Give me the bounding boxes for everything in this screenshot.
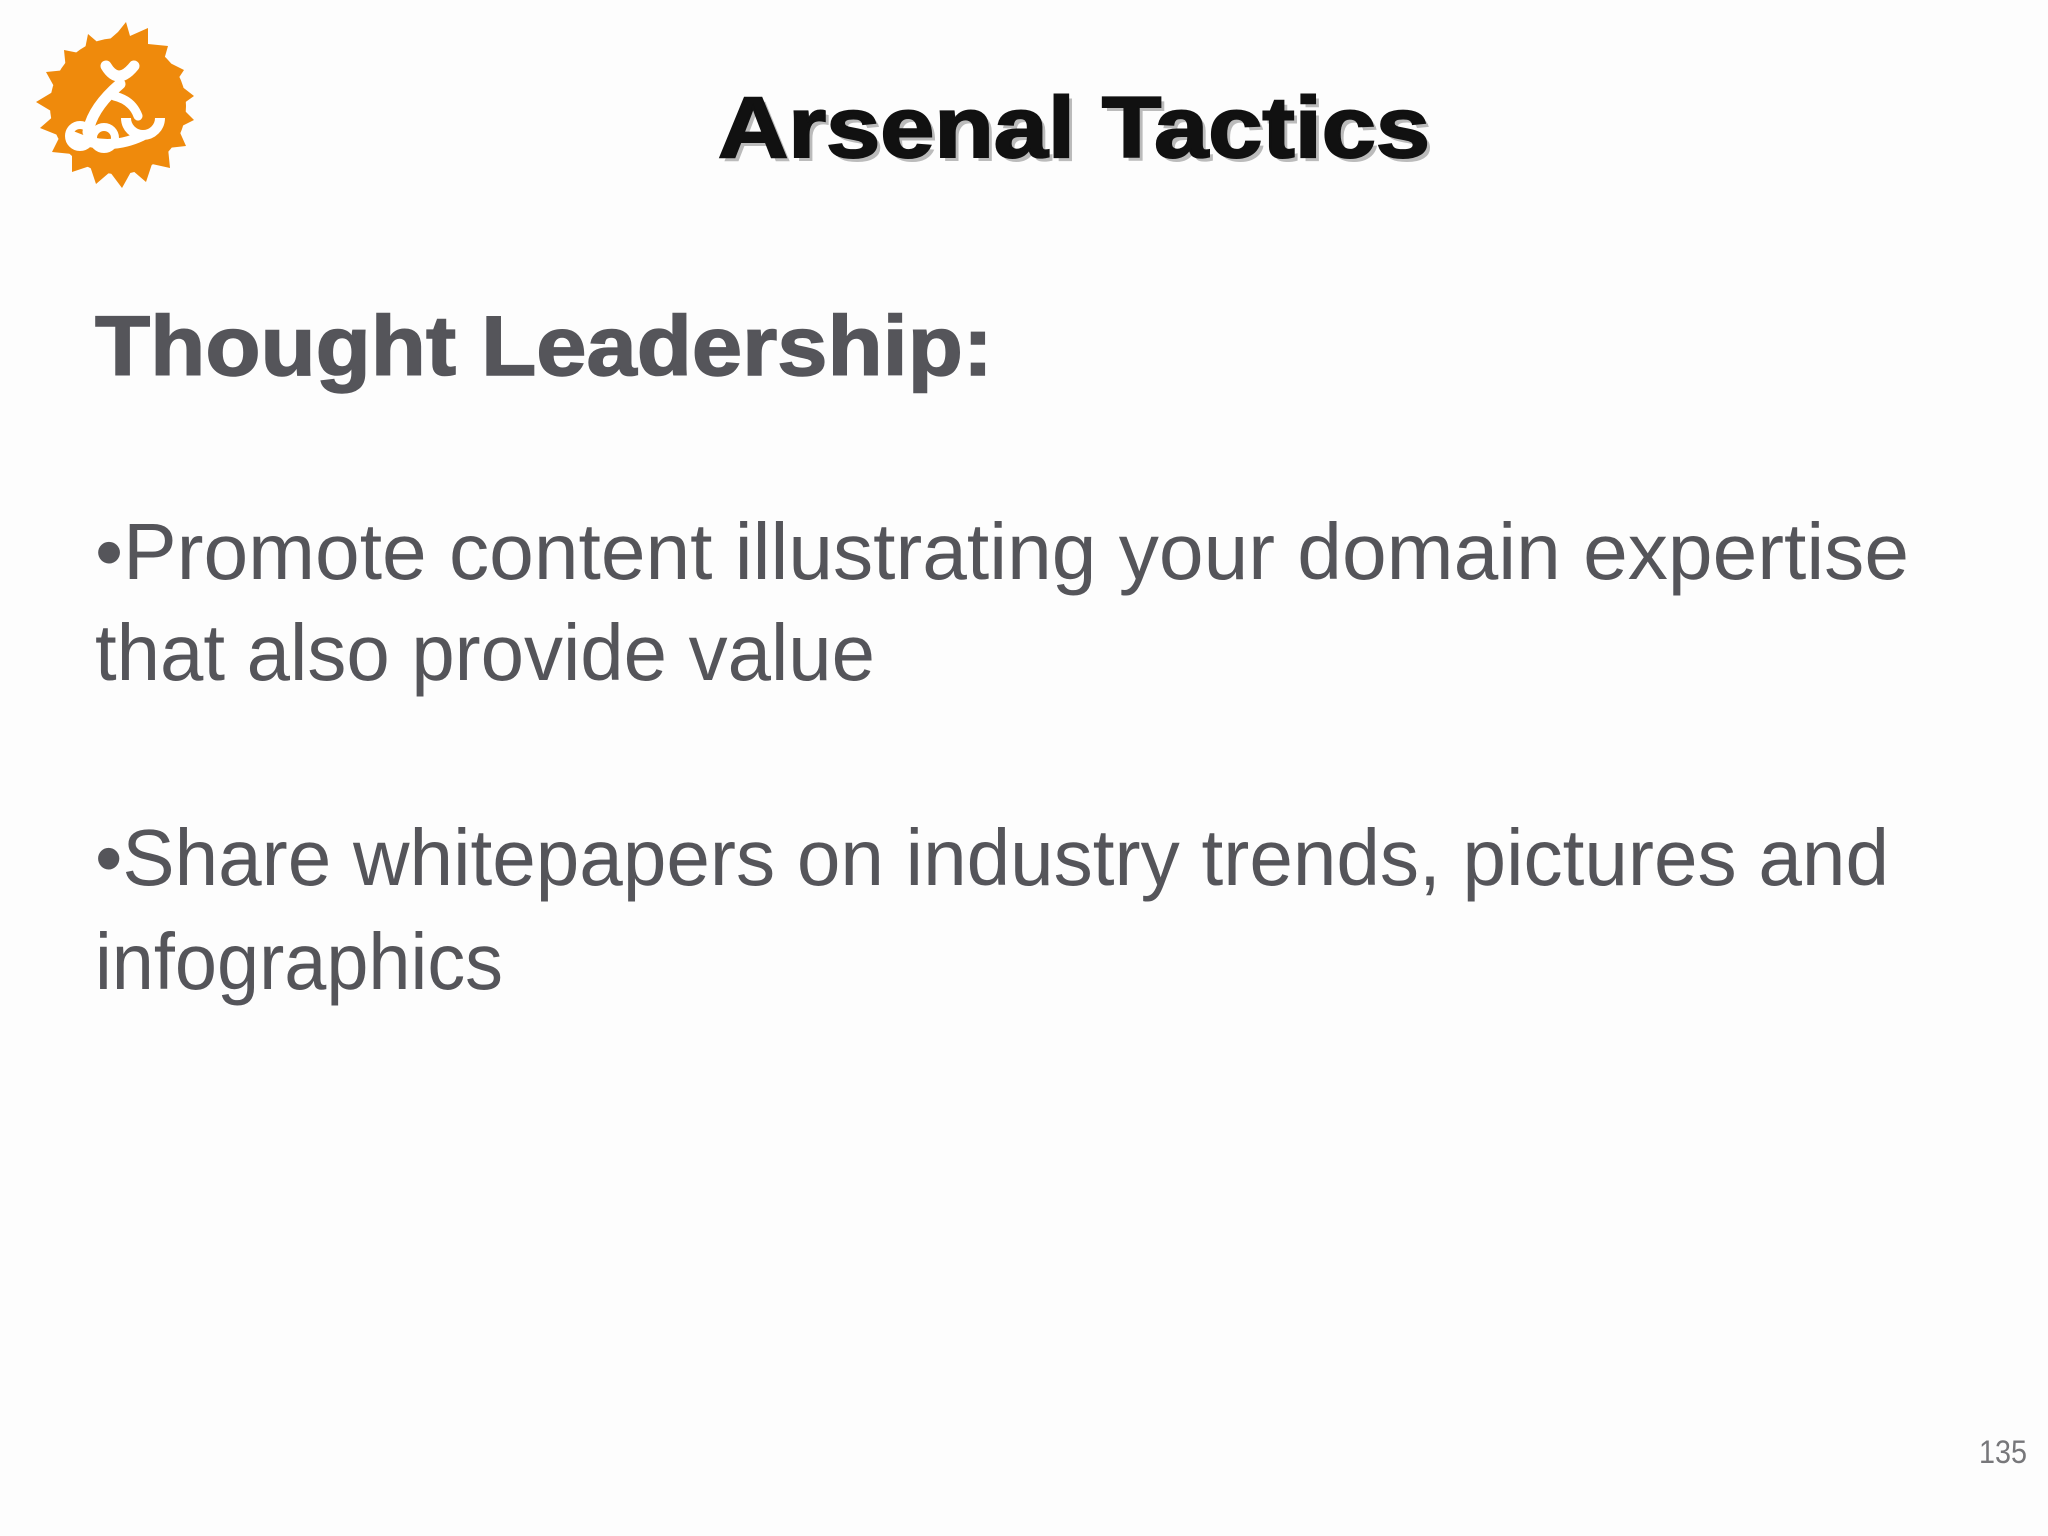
title: Arsenal Tactics	[718, 80, 1430, 176]
text block: bullet 1	[95, 507, 1909, 697]
text block: bullet 1: that also provide value	[95, 608, 875, 697]
icon: orange splat logo	[36, 22, 194, 188]
text block: bullet 2: •Share whitepapers on industry trends, pictures and	[95, 813, 1889, 902]
text block: bullet 1: •Promote content illustrating your domain expertise	[95, 507, 1909, 596]
page number: 135	[1979, 1434, 2027, 1470]
text block: bullet 2	[95, 813, 1889, 1006]
heading: Thought Leadership: Thought Leadership:	[95, 299, 993, 393]
title: Arsenal Tactics	[722, 84, 1434, 180]
text block: bullet 2: infographics	[95, 917, 503, 1006]
